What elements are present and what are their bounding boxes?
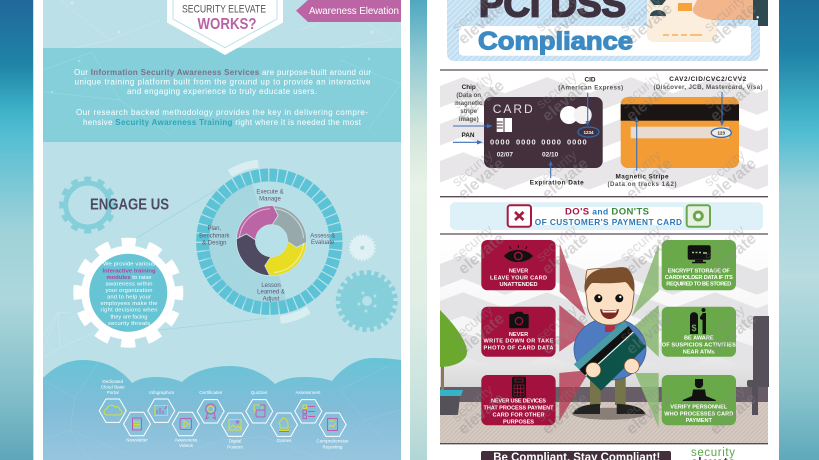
tile: never write down card data — [481, 307, 556, 357]
card front: 0000 — [490, 138, 511, 147]
illustration: hand holding card — [647, 0, 768, 42]
cycle segment: execute — [272, 206, 307, 247]
icon: cross — [508, 205, 531, 227]
tile: encrypt storage: CARDHOLDER DATA IF ITS — [665, 275, 733, 281]
watermarks: elevate — [707, 0, 760, 48]
tile: encrypt storage: ENCRYPT STORAGE OF — [668, 268, 730, 274]
callout text: modules to raise — [106, 275, 152, 281]
tile: never leave card unattended: UNATTENDED — [499, 282, 538, 288]
card front: 0000 — [567, 138, 588, 147]
watermarks: elevate — [707, 390, 760, 438]
cycle segment: assess — [265, 242, 306, 276]
banner heading — [535, 206, 682, 227]
scene: office background — [440, 255, 769, 443]
cycle labels: Execute & — [256, 190, 284, 196]
card labels: (Discover, JCB, Mastercard, Visa) — [654, 84, 762, 91]
watermarks: elevate — [707, 310, 760, 358]
rays: red and green — [559, 244, 659, 428]
callout text: security threats — [108, 321, 150, 327]
paragraph 2: Our research backed methodology provides the key in delivering compre- — [76, 108, 368, 117]
icon: small gear — [62, 179, 114, 231]
cycle labels — [199, 190, 335, 302]
watermarks: security — [617, 381, 664, 425]
watermarks: elevate — [455, 77, 508, 125]
card front: 02/10 — [542, 152, 559, 159]
module: digital posters: Posters — [227, 444, 243, 450]
tile: be aware at atms: OF SUSPICIOS ACTIVITIES — [662, 342, 736, 348]
callout text — [100, 262, 158, 327]
logo: security elevate: security — [691, 447, 735, 459]
watermarks: elevate — [539, 390, 592, 438]
card front: 0000 — [516, 138, 537, 147]
tree — [440, 310, 467, 391]
badge: security elevate works: SECURITY ELEVATE — [182, 4, 266, 16]
module: infographics — [148, 390, 175, 422]
watermarks: security — [617, 221, 664, 265]
module: comprehensive reporting — [316, 413, 349, 450]
banner heading: DO'S and DON'TS — [565, 206, 649, 217]
cloud: service modules — [43, 358, 401, 460]
panel: security awareness services — [33, 0, 410, 460]
banner: do's and don'ts — [450, 202, 763, 230]
watermarks: security — [701, 301, 748, 345]
tile: never use other devices: CARD FOR OTHER — [492, 412, 544, 418]
arrows — [453, 92, 724, 178]
icon: atm user: $ — [691, 323, 697, 333]
watermarks: elevate — [623, 310, 676, 358]
icon: teal gear — [339, 273, 395, 329]
module: quizzes — [246, 390, 273, 423]
watermarks — [446, 0, 760, 438]
module: newsletter: Newsletter — [126, 438, 148, 442]
cycle segment: plan — [236, 206, 278, 240]
watermarks: elevate — [623, 0, 676, 48]
tag: awareness elevation — [296, 0, 401, 22]
watermarks: security — [533, 381, 580, 425]
watermarks: security — [533, 68, 580, 112]
paragraph 1 — [74, 68, 371, 96]
module: assessment: Assessment — [295, 390, 321, 395]
tile: verify personnel — [662, 375, 736, 425]
module: awareness videos: Videos — [179, 443, 194, 448]
icon: monitor — [688, 245, 711, 263]
cycle labels: Evaluate — [311, 240, 335, 246]
tile: be aware at atms: NEAR ATMs — [683, 349, 715, 355]
watermarks: security — [449, 146, 496, 190]
tile: never use other devices: THAT PROCESS PAYMENT — [484, 406, 554, 412]
watermarks: elevate — [707, 77, 760, 125]
watermarks: elevate — [455, 230, 508, 278]
watermarks: elevate — [623, 77, 676, 125]
connector lines — [133, 189, 267, 330]
watermarks: security — [617, 68, 664, 112]
watermarks: elevate — [455, 155, 508, 203]
divider lines — [440, 70, 768, 444]
cycle labels: Manage — [259, 196, 282, 202]
watermarks: security — [533, 301, 580, 345]
cycle labels: Plan, — [207, 226, 221, 232]
watermarks: elevate — [623, 230, 676, 278]
title: compliance: Compliance — [478, 27, 633, 55]
card front — [484, 97, 603, 168]
tile: encrypt storage: REQUIRED TO BE STORED — [666, 282, 731, 288]
tile: be aware at atms: BE AWARE — [684, 336, 714, 342]
watermarks: elevate — [539, 0, 592, 48]
panel: pci dss compliance — [421, 0, 799, 460]
cycle labels: Benchmark — [199, 234, 230, 240]
watermarks: security — [701, 381, 748, 425]
tile: never leave card unattended — [481, 240, 556, 290]
watermarks: security — [533, 221, 580, 265]
tile: never write down card data: WRITE DOWN OR TAKE — [484, 339, 554, 345]
tile: never leave card unattended: LEAVE YOUR CARD — [490, 275, 547, 281]
module: comprehensive reporting: Reporting — [323, 444, 343, 450]
tag: awareness elevation: Awareness Elevation — [309, 6, 399, 17]
callout text: We provide various — [103, 262, 155, 268]
watermarks: elevate — [539, 77, 592, 125]
tile: verify personnel: PAYMENT — [686, 418, 713, 424]
card labels: stripe — [460, 108, 478, 115]
tile: be aware at atms — [662, 307, 736, 357]
card back: 123 — [718, 130, 726, 136]
module: comprehensive reporting: Comprehensive — [316, 438, 349, 444]
card back — [621, 97, 739, 168]
icon: pale gear — [350, 235, 375, 260]
callout text: awareness within — [106, 281, 152, 287]
card front: 02/07 — [497, 152, 513, 159]
module: games — [270, 413, 298, 443]
card labels: Expiration Date — [530, 179, 584, 186]
band: intro text — [43, 48, 401, 142]
callout text: Interactive training — [102, 268, 156, 274]
icon: payment device — [512, 377, 526, 398]
module: awareness videos: Awareness — [175, 438, 198, 442]
paragraph 2 — [76, 108, 368, 127]
watermarks: elevate — [623, 390, 676, 438]
watermarks: elevate — [623, 155, 676, 203]
watermarks: security — [617, 146, 664, 190]
watermarks: security — [701, 146, 748, 190]
module: assessment — [295, 390, 322, 423]
heading: engage us: ENGAGE US — [90, 196, 169, 213]
tile: never use other devices — [481, 375, 556, 425]
icon: camera — [509, 312, 529, 328]
card front: 0000 — [541, 138, 562, 147]
watermarks: elevate — [539, 310, 592, 358]
card front: 1234 — [583, 130, 594, 135]
paragraph 1: Our Information Security Awareness Services are purpose-built around our — [74, 68, 371, 77]
watermarks: elevate — [455, 390, 508, 438]
callout text: employees make the — [100, 301, 158, 307]
tile: never leave card unattended: NEVER — [509, 268, 528, 274]
badge: security elevate works — [167, 0, 283, 55]
watermarks: security — [533, 146, 580, 190]
watermarks: elevate — [539, 230, 592, 278]
watermarks: elevate — [707, 155, 760, 203]
gear callout: interactive training modules — [78, 243, 178, 343]
section: card anatomy — [440, 76, 768, 190]
watermarks: security — [449, 301, 496, 345]
card labels: CID — [584, 77, 596, 84]
card labels: magnetic — [455, 100, 483, 107]
cycle labels: Lesson — [261, 283, 281, 289]
paragraph 2: hensive Security Awareness Training right where it is needed the most — [83, 118, 362, 127]
chair — [747, 316, 769, 415]
module: newsletter — [124, 412, 150, 442]
card front: CARD — [493, 102, 533, 116]
callout text: right decisions when — [100, 308, 158, 314]
tile: encrypt storage — [662, 240, 736, 290]
watermarks: security — [449, 68, 496, 112]
callout text: and to help your — [107, 294, 151, 300]
cycle labels: Adjust — [263, 296, 280, 302]
cycle labels: Assess & — [310, 234, 335, 240]
tile: never write down card data: NEVER — [509, 332, 528, 338]
cycle labels: Learned & — [257, 290, 285, 296]
module: certificates: Certificates — [199, 390, 223, 395]
ring tabs — [230, 164, 309, 320]
bench — [440, 390, 463, 415]
icon: eye — [504, 245, 533, 262]
module: digital posters: Digital — [229, 438, 241, 444]
watermarks: security — [449, 381, 496, 425]
tile: verify personnel: VERIFY PERSONNEL — [670, 404, 728, 410]
watermarks: elevate — [539, 155, 592, 203]
tile: never use other devices: NEVER USE DEVICES — [491, 399, 546, 405]
module: cloud portal — [99, 379, 126, 422]
watermarks: security — [701, 221, 748, 265]
cycle labels: & Design — [202, 240, 226, 246]
card labels: (Data on tracks 1&2) — [608, 181, 676, 188]
module: cloud portal: Cloud Base — [101, 384, 125, 390]
watermarks: security — [701, 68, 748, 112]
module: certificates — [197, 390, 224, 423]
tile: never use other devices: PURPOSES — [503, 419, 534, 425]
card labels: (American Express) — [558, 84, 623, 91]
module: games: Games — [277, 438, 292, 443]
module: infographics: Infographics — [149, 390, 175, 395]
big payment card — [574, 321, 646, 391]
icon: circle — [687, 205, 710, 227]
card labels: (Data on — [456, 92, 481, 99]
card labels: image) — [459, 116, 479, 123]
paragraph 1: unique training platform built from the ground up to provide an interactive — [74, 78, 371, 87]
callout text: your organization — [106, 288, 152, 294]
card labels — [455, 76, 762, 188]
card labels: Chip — [462, 84, 476, 91]
header: pci dss compliance — [447, 0, 768, 61]
tile: verify personnel: WHO PROCESSES CARD — [664, 411, 733, 417]
watermarks: elevate — [455, 310, 508, 358]
module: cloud portal: Dedicated — [102, 379, 123, 384]
card labels: Magnetic Stripe — [616, 173, 669, 180]
illustration: man holding card — [572, 267, 646, 420]
card labels: CAV2/CID/CVC2/CVV2 — [669, 76, 747, 83]
module: quizzes: Quizzes — [251, 390, 268, 395]
diagram: engagement cycle — [199, 164, 336, 320]
paragraph 1: and engaging experience to truly educate users. — [127, 87, 317, 96]
module: digital posters — [222, 413, 248, 450]
module: cloud portal: Portal — [107, 390, 119, 395]
badge: security elevate works: WORKS? — [198, 16, 256, 33]
callout text: they are facing — [110, 314, 148, 320]
banner heading: OF CUSTOMER'S PAYMENT CARD — [535, 217, 682, 227]
tile: never write down card data: PHOTO OF CARD DATA — [484, 346, 554, 352]
card labels: PAN — [461, 132, 475, 139]
watermarks: security — [617, 301, 664, 345]
module: awareness videos — [172, 412, 199, 448]
watermarks: elevate — [455, 0, 508, 48]
watermarks: elevate — [707, 230, 760, 278]
cycle segment: lessons — [236, 234, 271, 276]
icon: clerk — [683, 379, 716, 401]
watermarks: security — [449, 221, 496, 265]
